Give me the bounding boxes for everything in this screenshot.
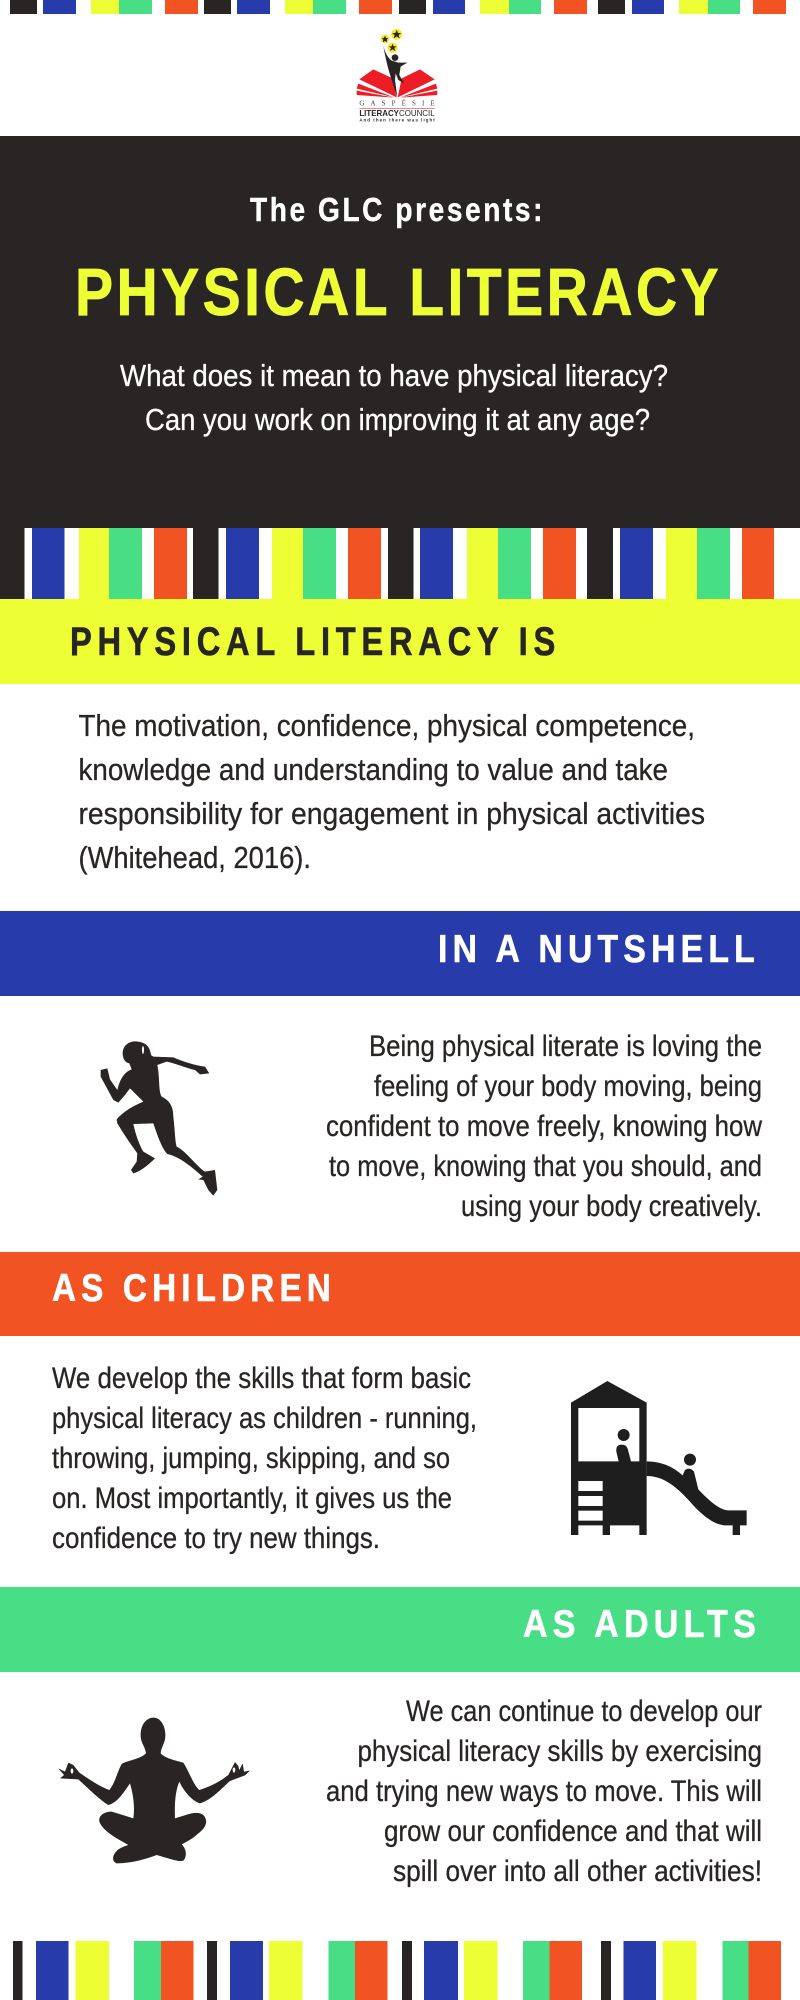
logo: Gaspésie Literacy Council: GASPÉSIE: [359, 99, 435, 107]
nutshell text: using your body creatively.: [461, 1190, 762, 1223]
hero panel: [0, 136, 800, 528]
children text: confidence to try new things.: [52, 1522, 380, 1555]
definition text: [78, 708, 705, 875]
panel: physical literacy is: [0, 599, 800, 875]
definition text: knowledge and understanding to value and take: [78, 752, 668, 787]
children text: throwing, jumping, skipping, and so: [52, 1442, 450, 1475]
hero subtitle: Can you work on improving it at any age?: [145, 402, 650, 437]
hero subtitle: [120, 358, 668, 437]
top colour stripe: [10, 0, 786, 14]
nutshell text: [326, 1030, 763, 1223]
children text: [52, 1362, 477, 1555]
definition text: (Whitehead, 2016).: [78, 840, 311, 875]
heading band: as adults: [0, 1587, 800, 1672]
children text: physical literacy as children - running,: [52, 1402, 477, 1435]
icon: person meditating: [58, 1718, 250, 1863]
definition text: The motivation, confidence, physical competence,: [78, 708, 695, 743]
logo: Gaspésie Literacy Council: LITERACYCOUNCIL: [359, 108, 435, 118]
adults text: [326, 1695, 762, 1888]
definition text: responsibility for engagement in physical activities: [78, 796, 705, 831]
hero subtitle: What does it mean to have physical literacy?: [120, 358, 668, 393]
bottom colour stripe: [13, 1941, 781, 2000]
adults text: spill over into all other activities!: [393, 1855, 762, 1888]
icon: running woman: [101, 1041, 217, 1196]
heading band: as children: AS CHILDREN: [52, 1267, 336, 1310]
children text: We develop the skills that form basic: [52, 1362, 471, 1395]
logo: Gaspésie Literacy Council: [357, 29, 437, 123]
logo: Gaspésie Literacy Council: And then there was light: [359, 118, 435, 123]
hero kicker: The GLC presents:: [250, 191, 545, 228]
heading band: physical literacy is: PHYSICAL LITERACY IS: [70, 620, 561, 664]
heading band: physical literacy is: [0, 599, 800, 684]
icon: children on playground slide: [571, 1381, 747, 1535]
heading band: in a nutshell: [0, 911, 800, 996]
heading band: as adults: AS ADULTS: [523, 1603, 761, 1646]
panel: as children: [0, 1252, 800, 1555]
heading band: as children: [0, 1252, 800, 1336]
panel: as adults: [0, 1587, 800, 1888]
panel: in a nutshell: [0, 911, 800, 1223]
middle colour stripe: [0, 528, 774, 599]
heading band: in a nutshell: IN A NUTSHELL: [438, 928, 760, 971]
children text: on. Most importantly, it gives us the: [52, 1482, 452, 1515]
